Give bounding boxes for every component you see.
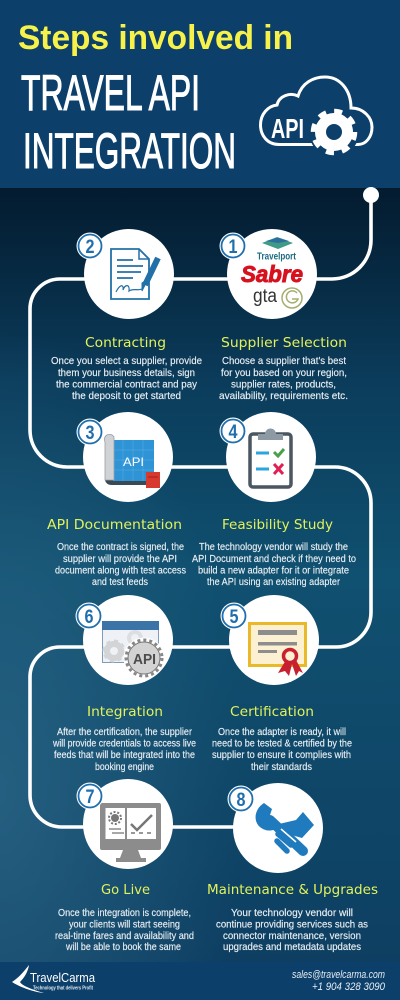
icon: supplier logos: Travelport — [257, 250, 296, 262]
text: supplier selection description: availability, requirements etc. — [219, 391, 348, 402]
badge 5: 5 — [230, 607, 239, 628]
text: contracting description: the commercial contract and pay — [56, 380, 198, 390]
panel: step 7 go live — [55, 779, 194, 953]
footer contact details — [292, 969, 386, 993]
text: supplier selection description — [219, 356, 348, 402]
text: integration description: will provide credentials to access live — [52, 738, 196, 750]
badge 6 — [76, 602, 102, 630]
text: contracting description — [51, 356, 202, 402]
badge 8 — [228, 786, 254, 812]
icon: API window with gears — [102, 621, 164, 678]
text: feasibility study description: The technology vendor will study the — [199, 542, 348, 553]
text: certification description: supplier to ensure it complies with — [212, 750, 351, 761]
badge 2 — [76, 232, 104, 260]
text: maintenance description — [216, 908, 368, 953]
text: go live description — [55, 908, 194, 953]
title — [18, 19, 293, 179]
heading: integration: Integration — [87, 704, 163, 720]
text: go live description: real-time fares and availability and — [55, 931, 194, 942]
title line: integration: INTEGRATION — [23, 123, 236, 179]
badge 8: 8 — [236, 790, 246, 811]
icon: API window with gears: API — [133, 651, 156, 668]
heading: contracting: Contracting — [85, 335, 166, 351]
text: contracting description: them your business details, sign — [58, 368, 195, 379]
text: api documentation description: and test feeds — [92, 577, 148, 588]
badge 5 — [220, 602, 248, 630]
heading: maintenance and upgrades: Maintenance & Upgrades — [207, 882, 378, 898]
text: feasibility study description — [192, 542, 356, 588]
icon: API blueprint book — [104, 434, 160, 488]
icon: checklist clipboard — [250, 429, 291, 487]
heading: go live: Go Live — [101, 882, 150, 898]
text: contracting description: Once you select a supplier, provide — [51, 356, 202, 367]
panel: step 5 certification — [212, 595, 352, 773]
text: feasibility study description: build a new adapter for it or integrate — [198, 566, 349, 576]
text: integration description: feeds that will be integrated into the — [54, 750, 195, 761]
icon: monitor with flight search — [100, 803, 161, 862]
footer contact details: +1 904 328 3090 — [312, 981, 386, 993]
panel: step 6 integration — [52, 595, 196, 773]
badge 7: 7 — [86, 787, 94, 808]
badge 3: 3 — [86, 423, 94, 444]
text: feasibility study description: the API using an existing adapter — [207, 577, 341, 588]
panel: step 8 maintenance and upgrades — [207, 783, 378, 953]
text: certification description — [212, 727, 352, 773]
icon: supplier logos — [241, 237, 303, 308]
text: api documentation description: supplier will provide the API — [63, 554, 177, 565]
footer logo: TravelCarma: Technology that delivers Profit — [33, 986, 93, 992]
footer band — [0, 962, 400, 1000]
badge 4: 4 — [228, 422, 238, 443]
text: maintenance description: Your technology vendor will — [231, 908, 353, 919]
heading: certification: Certification — [230, 704, 314, 720]
text: go live description: Once the integration is complete, — [58, 908, 191, 919]
text: integration description: booking engine — [95, 762, 154, 773]
heading: api documentation: API Documentation — [47, 517, 182, 533]
text: certification description: Once the adapter is ready, it will — [218, 727, 346, 738]
badge 1 — [220, 232, 246, 260]
header band — [0, 0, 400, 188]
badge 7 — [76, 782, 104, 810]
text: integration description: After the certification, the supplier — [57, 727, 193, 738]
text: api documentation description: document along with test access — [55, 566, 186, 576]
badge 2: 2 — [86, 237, 94, 258]
text: feasibility study description: API Document and check if they need to — [192, 554, 356, 565]
heading: supplier selection: Supplier Selection — [221, 335, 347, 351]
text: supplier selection description: supplier rates, products, — [231, 380, 336, 390]
badge 1: 1 — [228, 237, 238, 258]
icon: API cloud with gear — [260, 77, 372, 157]
badge 3 — [76, 418, 104, 446]
text: maintenance description: continue providing services such as — [216, 920, 368, 930]
text: maintenance description: connector maintenance, version — [223, 931, 361, 942]
heading: feasibility study: Feasibility Study — [222, 517, 333, 533]
panel: step 1 supplier selection — [219, 229, 348, 402]
text: integration description — [52, 727, 196, 773]
icon: certificate with ribbon — [250, 624, 306, 676]
icon: API blueprint book: API — [123, 455, 144, 469]
panel: step 2 contracting — [51, 229, 202, 402]
icon: hand holding wrench — [256, 803, 314, 851]
panel: step 3 api documentation — [47, 412, 186, 588]
body background — [0, 188, 400, 962]
icon: supplier logos: gta — [253, 286, 277, 307]
footer logo: TravelCarma — [12, 965, 96, 993]
footer logo: TravelCarma: TravelCarma — [30, 970, 96, 985]
badge 6: 6 — [84, 607, 94, 628]
text: go live description: your clients will start seeing — [69, 920, 180, 930]
badge 4 — [220, 418, 246, 444]
text: certification description: their standards — [251, 762, 312, 773]
icon: API cloud with gear: API — [271, 113, 304, 144]
text: go live description: will be able to book the same — [65, 942, 181, 953]
text: certification description: need to be tested & certified by the — [212, 738, 352, 750]
icon: supplier logos: Sabre — [241, 261, 303, 287]
text: api documentation description — [55, 542, 186, 588]
connector path through the steps — [30, 187, 379, 827]
icon: signed contract — [111, 249, 158, 299]
text: maintenance description: upgrades and metadata updates — [223, 942, 361, 953]
text: contracting description: the deposit to get started — [72, 391, 181, 402]
text: supplier selection description: Choose a supplier that's best — [222, 356, 346, 367]
text: supplier selection description: for you based on your region, — [221, 368, 347, 379]
text: api documentation description: Once the contract is signed, the — [57, 542, 184, 553]
title line: steps involved in: Steps involved in — [18, 19, 293, 57]
panel: step 4 feasibility study — [192, 412, 356, 588]
title line: travel api: TRAVEL API — [21, 65, 200, 121]
